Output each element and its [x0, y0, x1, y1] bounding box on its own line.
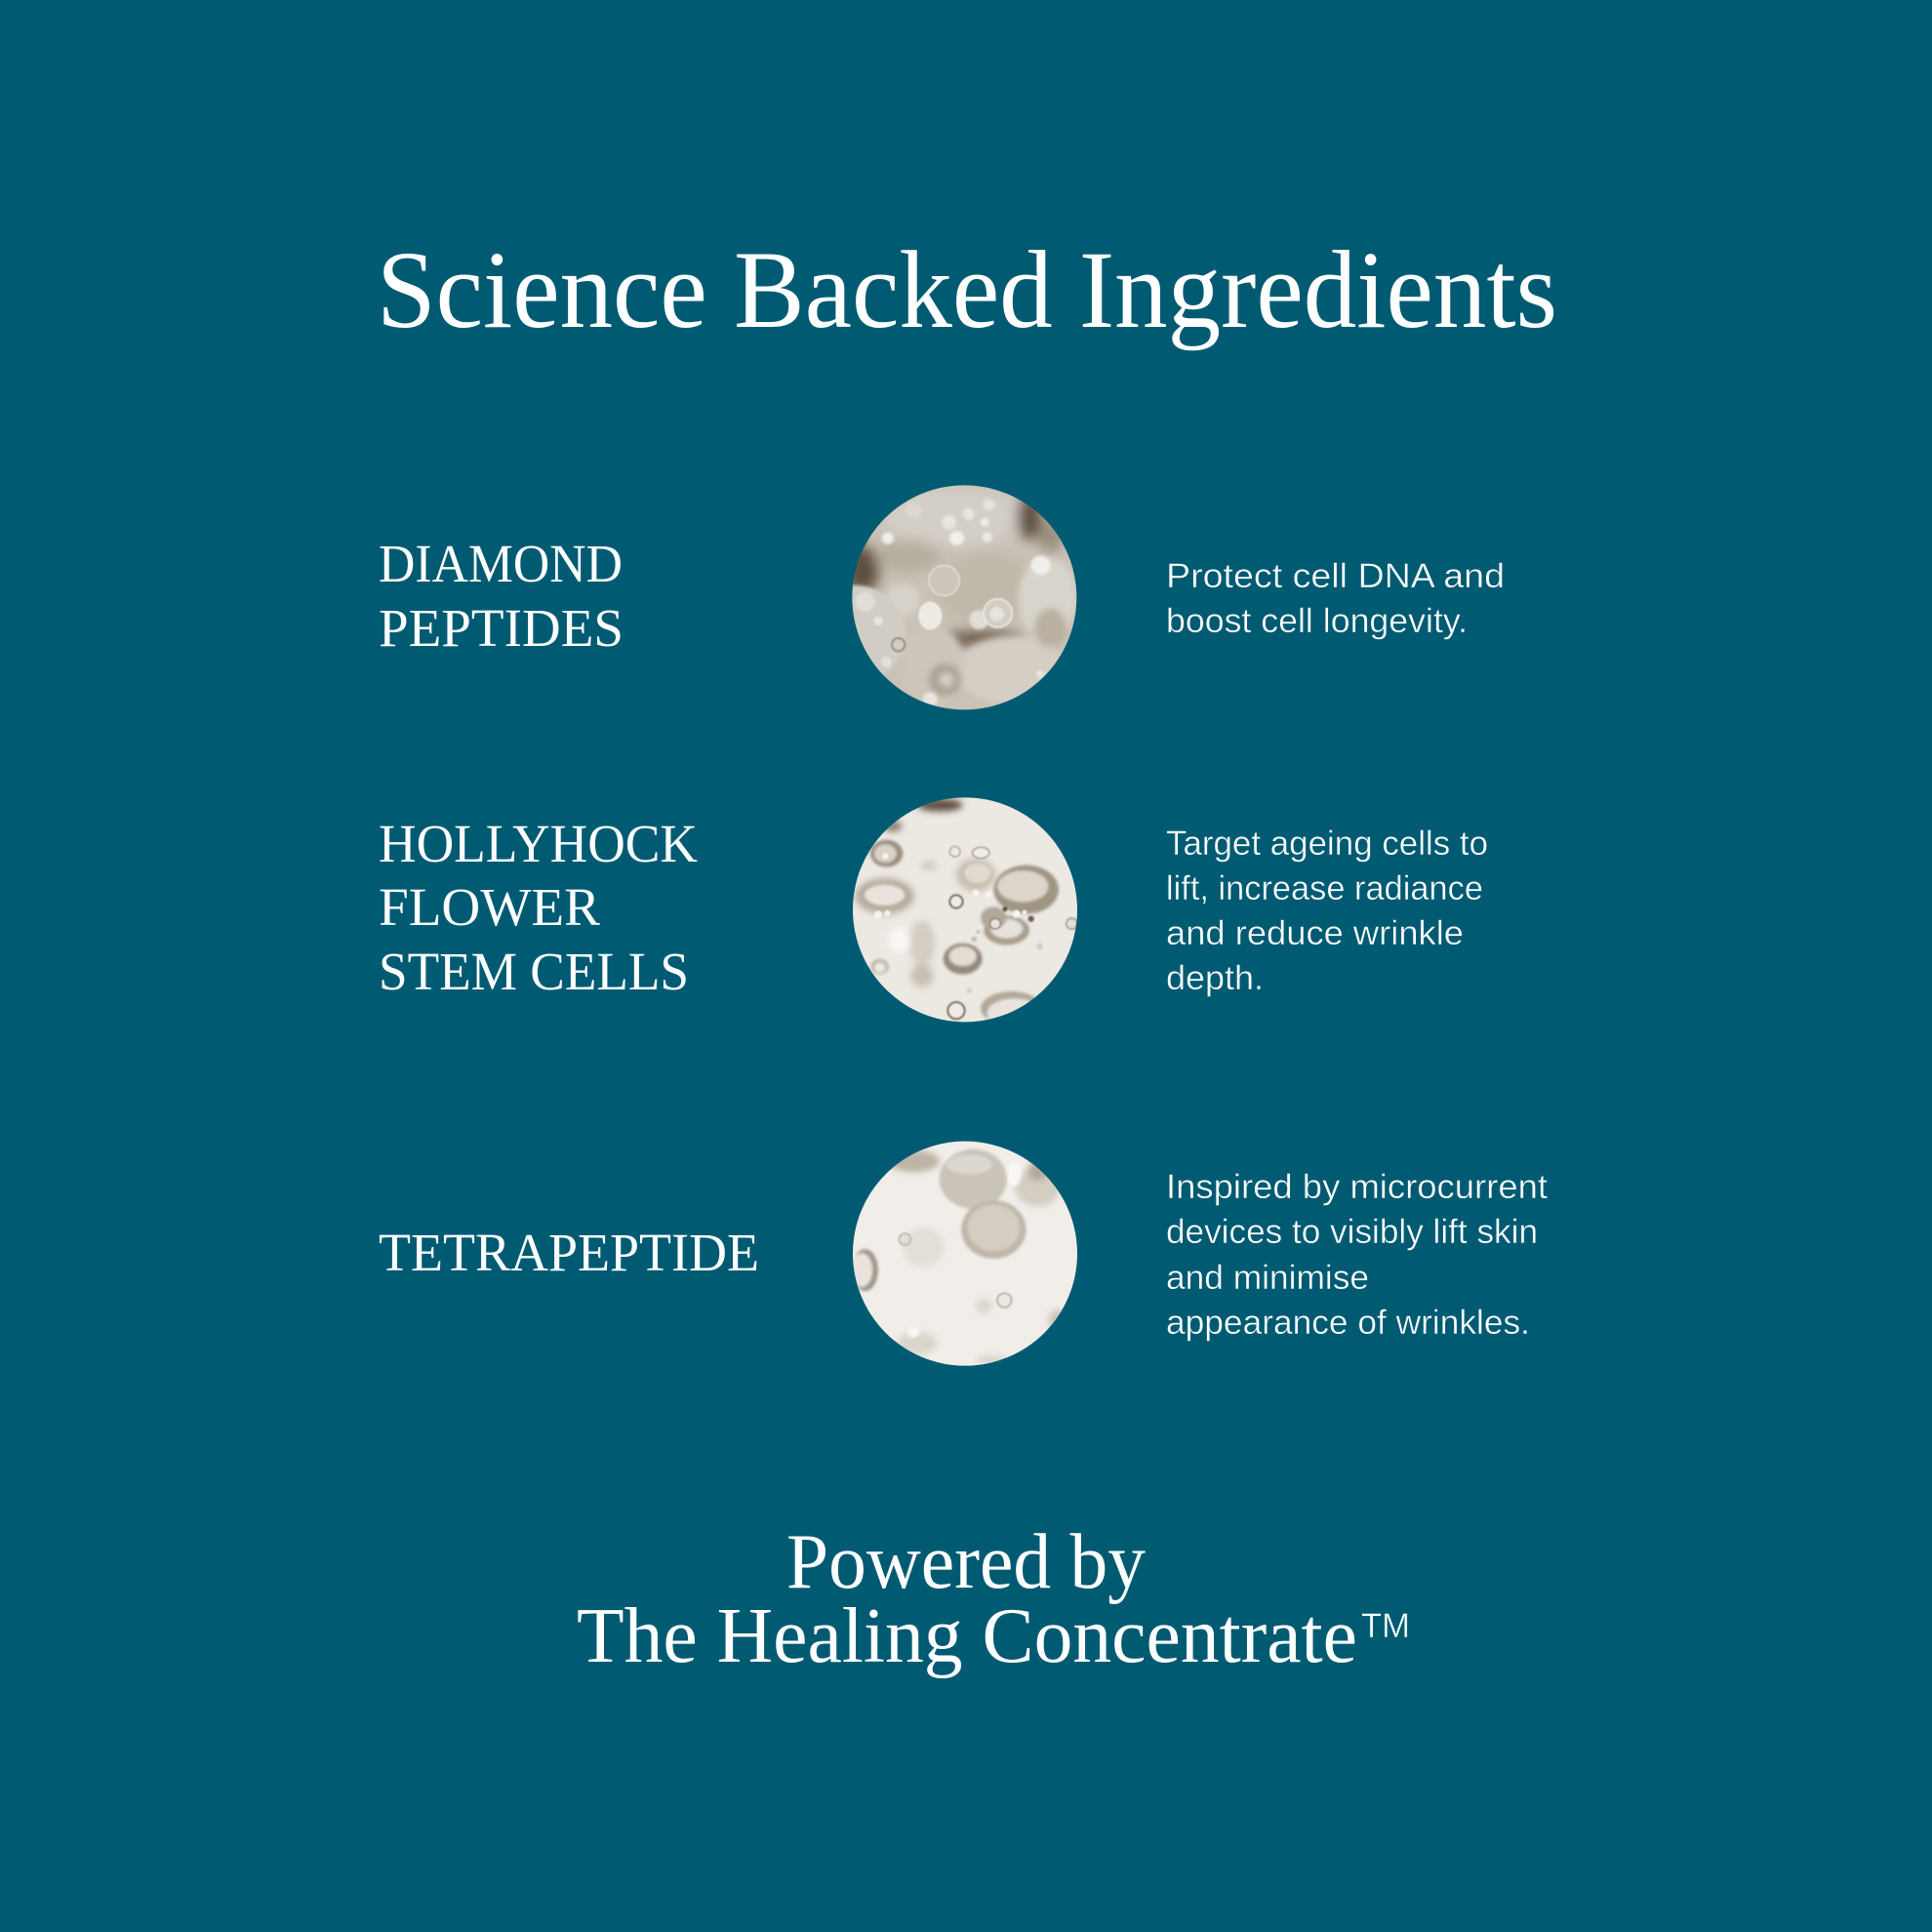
description: tetrapeptide: [1166, 1167, 1548, 1342]
photo: small clear bubbles in circle: [853, 797, 1077, 1023]
description: tetrapeptide: appearance of wrinkles.: [1166, 1303, 1530, 1342]
photo: large bubbles in circle: [852, 485, 1077, 710]
footer tagline: TM: [1361, 1607, 1410, 1645]
description: hollyhock flower stem cells: and reduce wrinkle: [1166, 913, 1464, 952]
footer tagline: Powered by: [786, 1517, 1146, 1605]
description: tetrapeptide: and minimise: [1166, 1258, 1369, 1297]
description: diamond peptides: [1166, 556, 1505, 640]
ingredient name: tetrapeptide: TETRAPEPTIDE: [379, 1223, 759, 1282]
ingredient name: hollyhock flower stem cells: [379, 814, 698, 1001]
description: tetrapeptide: Inspired by microcurrent: [1166, 1167, 1548, 1206]
footer tagline: [577, 1517, 1410, 1679]
ingredient name: diamond peptides: [379, 534, 624, 658]
description: diamond peptides: Protect cell DNA and: [1166, 556, 1505, 595]
photo: soft bubbles in circle: [853, 1142, 1077, 1366]
ingredient row: tetrapeptide: [379, 1142, 1548, 1366]
ingredient name: hollyhock flower stem cells: STEM CELLS: [379, 942, 689, 1001]
description: hollyhock flower stem cells: [1166, 824, 1488, 997]
ingredient name: hollyhock flower stem cells: FLOWER: [379, 877, 600, 937]
description: hollyhock flower stem cells: depth.: [1166, 958, 1264, 997]
title: Science Backed Ingredients: [377, 229, 1557, 351]
description: tetrapeptide: devices to visibly lift skin: [1166, 1212, 1538, 1251]
description: hollyhock flower stem cells: lift, increase radiance: [1166, 868, 1483, 907]
description: diamond peptides: boost cell longevity.: [1166, 601, 1468, 640]
ingredient name: hollyhock flower stem cells: HOLLYHOCK: [379, 814, 698, 873]
infographic page: [379, 250, 1553, 1678]
ingredient name: diamond peptides: PEPTIDES: [379, 598, 624, 658]
footer tagline: The Healing Concentrate: [577, 1591, 1357, 1679]
description: hollyhock flower stem cells: Target ageing cells to: [1166, 824, 1488, 863]
ingredient name: diamond peptides: DIAMOND: [379, 534, 623, 593]
ingredient row: diamond peptides: [380, 485, 1503, 710]
ingredient row: hollyhock flower stem cells: [381, 797, 1487, 1023]
